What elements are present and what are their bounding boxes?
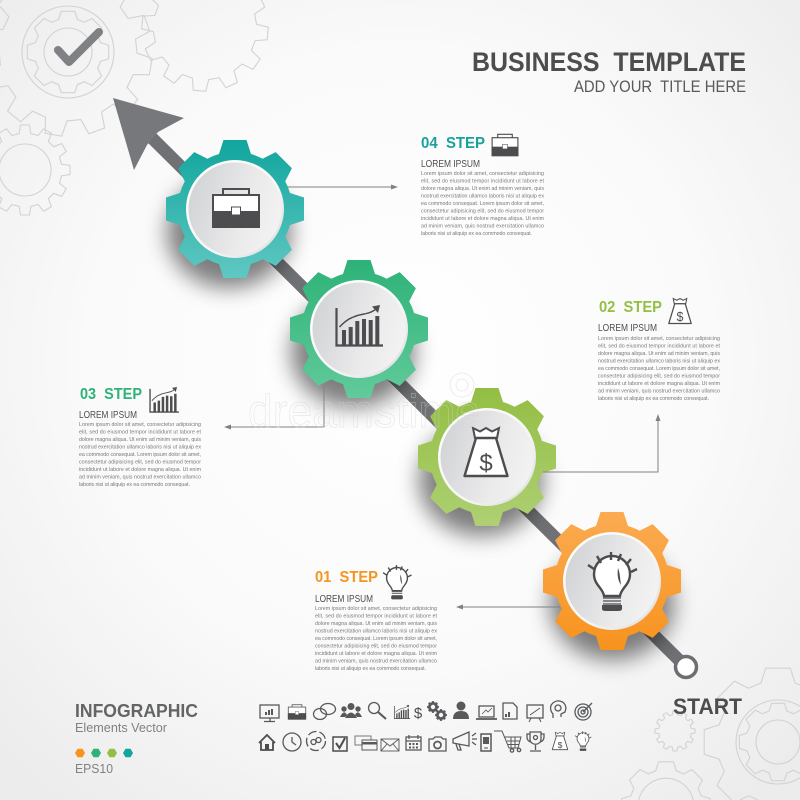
icon: document — [503, 703, 517, 719]
text block: step 04: 04 STEP — [421, 135, 485, 152]
icon: check mark — [58, 32, 99, 62]
text block: step 03: consectetur adipisicing elit, sed do eiusmod tempor — [79, 460, 201, 466]
text block: step 03: dolore magna aliqua. Ut enim ad minim veniam, quis — [79, 437, 201, 443]
icon: camera — [429, 737, 446, 751]
start label: START — [673, 694, 743, 719]
text block: step 04: consectetur adipisicing elit, sed do eiusmod tempor — [421, 208, 544, 214]
icon: trophy — [527, 732, 544, 751]
text block: step 01: consectetur adipisicing elit, sed do eiusmod tempor — [315, 644, 437, 650]
connector: step 01 — [456, 604, 560, 610]
text block: step 01: nostrud exercitation ullamco laboris nisi ut aliquip ex — [315, 628, 437, 634]
text block: step 02: Lorem ipsum dolor sit amet, consectetur adipisicing — [598, 336, 720, 342]
title — [472, 47, 746, 96]
icon: money bag small — [552, 732, 568, 750]
title: BUSINESS TEMPLATE — [472, 47, 746, 77]
text block: step 01: incididunt ut labore et dolore magna aliqua. Ut enim — [315, 651, 438, 657]
gear shadows — [167, 176, 674, 660]
icon: credit cards — [355, 736, 377, 750]
icon: person — [453, 702, 469, 719]
icon: chat bubbles — [314, 704, 336, 720]
connector: step 03 — [224, 385, 324, 430]
icon row 1 — [260, 701, 592, 722]
gear 04: teal briefcase — [166, 140, 304, 278]
icon: gears — [427, 701, 447, 721]
icon: bar chart small — [394, 705, 410, 719]
text block: step 02: dolore magna aliqua. Ut enim ad minim veniam, quis — [598, 351, 720, 357]
icon: light bulb — [383, 565, 412, 599]
icon: magnifier — [368, 702, 386, 719]
text block: step 01: ea commodo consequat. Lorem ipsum dolor sit amet, — [315, 636, 437, 642]
icon: money bag — [669, 299, 691, 324]
text block: step 01: dolore magna aliqua. Ut enim ad minim veniam, quis — [315, 621, 437, 627]
icon: dollar: $ — [414, 705, 423, 722]
icon: monitor — [260, 705, 279, 722]
text block: step 02: incididunt ut labore et dolore magna aliqua. Ut enim — [598, 381, 721, 387]
background gears: bottom right — [622, 668, 800, 800]
text block: step 01: 01 STEP — [315, 569, 378, 586]
colour hexagons — [75, 749, 133, 757]
text block: step 01 — [315, 565, 439, 672]
icon: house — [259, 735, 275, 750]
text block: step 01: elit, sed do eiusmod tempor incididunt ut labore et — [315, 614, 438, 620]
icon: cart — [494, 731, 521, 752]
background gears: top left — [0, 0, 273, 215]
infographic label: INFOGRAPHIC — [75, 701, 198, 721]
text block: step 02: consectetur adipisicing elit, sed do eiusmod tempor — [598, 374, 720, 380]
text block: step 03: laboris nisi ut aliquip ex ea commodo consequat. — [79, 482, 190, 488]
icon: envelope — [381, 739, 399, 751]
icon: megaphone — [453, 732, 477, 750]
icon: cycle — [306, 732, 326, 750]
text block: step 01: laboris nisi ut aliquip ex ea commodo consequat. — [315, 666, 426, 672]
text block: step 04: elit, sed do eiusmod tempor incididunt ut labore et — [421, 178, 545, 184]
text block: step 01: ad minim veniam, quis nostrud exercitation ullamco — [315, 658, 437, 664]
gear 01: orange bulb — [543, 512, 681, 650]
icon: presentation board — [527, 705, 543, 722]
connector arrowhead: step 02 — [656, 414, 660, 421]
icon: checkbox — [333, 737, 347, 751]
text block: step 04: ad minim veniam, quis nostrud exercitation ullamco — [421, 224, 544, 230]
text block: step 02: 02 STEP — [599, 299, 662, 316]
text block: step 02: laboris nisi ut aliquip ex ea commodo consequat. — [598, 396, 709, 402]
watermark: dreamstime — [248, 385, 480, 437]
text block: step 04: incididunt ut labore et dolore magna aliqua. Ut enim — [421, 216, 545, 222]
text block: step 01: Lorem ipsum dolor sit amet, consectetur adipisicing — [315, 606, 437, 612]
gear 03: green chart — [290, 260, 428, 398]
start circle — [676, 656, 696, 678]
text block: step 03 — [79, 386, 203, 488]
text block: step 03: LOREM IPSUM — [79, 410, 137, 421]
icon: target — [575, 703, 592, 720]
text block: step 02: elit, sed do eiusmod tempor incididunt ut labore et — [598, 344, 721, 350]
icon: people — [340, 703, 362, 718]
text block: step 01: LOREM IPSUM — [315, 594, 373, 605]
text block: step 03: Lorem ipsum dolor sit amet, consectetur adipisicing — [79, 422, 201, 428]
gear 02: lime money bag — [418, 388, 658, 526]
icon: clock — [283, 733, 301, 751]
text block: step 03: nostrud exercitation ullamco laboris nisi ut aliquip ex — [79, 444, 201, 450]
infographic label: Elements Vector — [75, 720, 168, 735]
text block: step 03: 03 STEP — [80, 386, 142, 403]
text block: step 03: ad minim veniam, quis nostrud exercitation ullamco — [79, 474, 201, 480]
text block: step 04: LOREM IPSUM — [421, 159, 480, 170]
infographic label: EPS10 — [75, 761, 113, 776]
icon: head — [551, 701, 566, 718]
infographic label — [75, 701, 198, 776]
icon row 2 — [259, 731, 591, 752]
icon: laptop — [476, 706, 497, 719]
text block: step 02: ad minim veniam, quis nostrud exercitation ullamco — [598, 388, 720, 394]
icon: briefcase small — [288, 705, 306, 720]
title: ADD YOUR TITLE HERE — [574, 78, 746, 96]
text block: step 02: nostrud exercitation ullamco laboris nisi ut aliquip ex — [598, 358, 720, 364]
text block: step 04: nostrud exercitation ullamco laboris nisi ut aliquip ex — [421, 194, 544, 200]
text block: step 04: Lorem ipsum dolor sit amet, consectetur adipisicing — [421, 171, 544, 177]
icon: light bulb small — [575, 731, 591, 751]
connector: step 04 — [285, 184, 398, 190]
text block: step 03: ea commodo consequat. Lorem ipsum dolor sit amet, — [79, 452, 201, 458]
icon: calendar — [406, 735, 421, 750]
text block: step 04: dolore magna aliqua. Ut enim ad minim veniam, quis — [421, 186, 544, 192]
text block: step 02: LOREM IPSUM — [598, 323, 657, 334]
text block: step 02 — [598, 299, 722, 402]
text block: step 04: laboris nisi ut aliquip ex ea commodo consequat. — [421, 231, 532, 237]
text block: step 04: ea commodo consequat. Lorem ipsum dolor sit amet, — [421, 201, 544, 207]
text block: step 02: ea commodo consequat. Lorem ipsum dolor sit amet, — [598, 366, 720, 372]
text block: step 04 — [421, 134, 546, 237]
text block: step 03: incididunt ut labore et dolore magna aliqua. Ut enim — [79, 467, 202, 473]
icon: growth chart — [150, 387, 179, 412]
icon: briefcase — [492, 134, 518, 156]
icon: phone — [481, 734, 491, 751]
arrow: timeline shaft and head — [113, 98, 680, 661]
text block: step 03: elit, sed do eiusmod tempor incididunt ut labore et — [79, 430, 202, 436]
